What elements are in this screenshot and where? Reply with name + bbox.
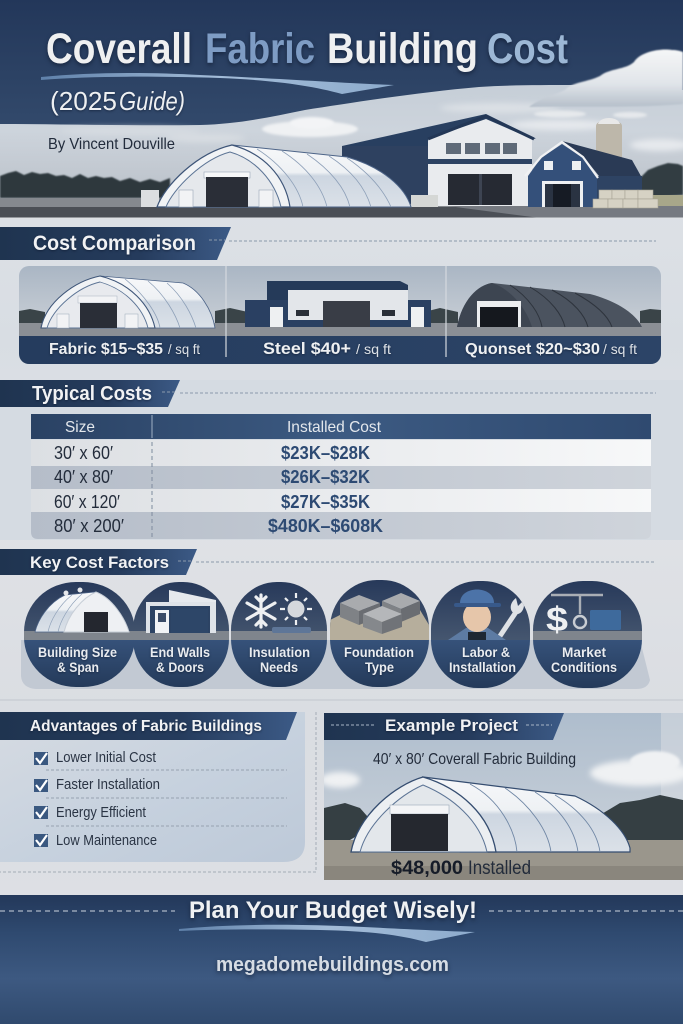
tree line left bbox=[0, 171, 170, 198]
ground bbox=[0, 198, 683, 207]
section heading: cost comparison bbox=[0, 227, 656, 260]
factor: labor and installation: Installation bbox=[449, 659, 516, 675]
table: typical costs bbox=[31, 414, 651, 539]
panel: cost comparison bbox=[19, 266, 661, 364]
section heading: typical costs bbox=[0, 380, 683, 540]
example heading: Example Project bbox=[385, 716, 518, 735]
table header: Installed Cost bbox=[287, 419, 382, 436]
example caption: 40′ x 80′ Coverall Fabric Building bbox=[373, 751, 576, 768]
table header: Size bbox=[65, 419, 95, 436]
call to action: Plan Your Budget Wisely! bbox=[189, 897, 477, 924]
table rows: 60′ x 120′ bbox=[54, 492, 121, 512]
advantages heading: Advantages of Fabric Buildings bbox=[30, 718, 262, 735]
factor: labor and installation bbox=[431, 581, 530, 688]
table header bbox=[31, 414, 651, 439]
footer bbox=[0, 895, 683, 1024]
factor: foundation type bbox=[330, 580, 429, 687]
title: Coverall bbox=[46, 25, 192, 73]
fabric building bbox=[141, 145, 438, 207]
advantages list: Faster Installation bbox=[56, 776, 160, 793]
steel warehouse bbox=[342, 114, 536, 206]
subtitle bbox=[50, 86, 185, 116]
section heading: key cost factors: Key Cost Factors bbox=[30, 553, 169, 572]
fabric option bbox=[41, 276, 215, 358]
factor: end walls and doors bbox=[133, 582, 229, 687]
factor: foundation type: Type bbox=[365, 659, 394, 675]
title: Cost bbox=[487, 25, 568, 73]
steel option bbox=[245, 281, 431, 358]
factor: insulation needs bbox=[231, 582, 327, 687]
table rows: $26K–$32K bbox=[281, 467, 370, 487]
advantages heading bbox=[0, 712, 297, 740]
title: Building bbox=[327, 25, 478, 73]
example price bbox=[391, 860, 530, 877]
hero illustration bbox=[0, 0, 683, 218]
factor: insulation needs: Needs bbox=[260, 659, 298, 675]
fabric option: Fabric $15~$35 bbox=[49, 341, 163, 358]
table rows: $23K–$28K bbox=[281, 443, 370, 463]
fabric option: / sq ft bbox=[168, 341, 200, 357]
table rows: 30′ x 60′ bbox=[54, 443, 114, 463]
website: megadomebuildings.com bbox=[216, 954, 449, 976]
example building bbox=[351, 777, 630, 852]
factor: foundation type: Foundation bbox=[344, 644, 414, 660]
factor: building size and span: Building Size bbox=[38, 644, 117, 660]
factor: end walls and doors: End Walls bbox=[150, 644, 210, 660]
quonset option: / sq ft bbox=[603, 341, 637, 357]
factor: end walls and doors: & Doors bbox=[156, 659, 204, 675]
advantages list: Energy Efficient bbox=[56, 804, 147, 821]
factor: building size and span bbox=[24, 582, 135, 687]
factor: market conditions bbox=[533, 581, 642, 688]
example heading bbox=[324, 713, 564, 740]
subtitle: Guide) bbox=[119, 86, 185, 116]
factor: market conditions: $ bbox=[546, 601, 568, 639]
table rows: $480K–$608K bbox=[268, 516, 383, 536]
table rows: 80′ x 200′ bbox=[54, 516, 125, 536]
panel: example project bbox=[320, 713, 683, 880]
factor: market conditions: Market bbox=[562, 644, 606, 660]
advantages list: Low Maintenance bbox=[56, 832, 157, 849]
factors backing panel bbox=[21, 640, 650, 689]
tree line right bbox=[640, 163, 683, 198]
title swoosh bbox=[41, 73, 394, 94]
factor: insulation needs: Insulation bbox=[249, 644, 310, 660]
quonset option: Quonset $20~$30 bbox=[465, 341, 600, 358]
section heading: cost comparison: Cost Comparison bbox=[33, 232, 196, 255]
table rows bbox=[54, 443, 383, 536]
example price: Installed bbox=[468, 858, 531, 879]
clouds bbox=[60, 50, 683, 151]
table rows: $27K–$35K bbox=[281, 492, 370, 512]
table rows: 40′ x 80′ bbox=[54, 467, 114, 487]
section heading: typical costs: Typical Costs bbox=[32, 383, 152, 405]
subtitle: (2025 bbox=[50, 86, 117, 116]
barn bbox=[525, 141, 642, 207]
byline: By Vincent Douville bbox=[48, 136, 175, 153]
silo bbox=[596, 118, 622, 160]
quonset option bbox=[457, 283, 642, 358]
title bbox=[46, 25, 568, 73]
advantages list: Lower Initial Cost bbox=[56, 749, 157, 766]
example price: $48,000 bbox=[391, 858, 463, 879]
steel option: Steel $40+ bbox=[263, 339, 351, 358]
factor: building size and span: & Span bbox=[57, 659, 99, 675]
steel option: / sq ft bbox=[356, 341, 391, 357]
pallets bbox=[593, 190, 658, 208]
factor: market conditions: Conditions bbox=[551, 659, 617, 675]
advantages list bbox=[34, 749, 287, 849]
header band bbox=[0, 0, 683, 125]
panel: advantages bbox=[0, 712, 316, 872]
section heading: key cost factors bbox=[0, 549, 656, 575]
footer swoosh bbox=[179, 925, 475, 942]
factor: labor and installation: Labor & bbox=[462, 644, 510, 660]
title: Fabric bbox=[205, 25, 315, 73]
